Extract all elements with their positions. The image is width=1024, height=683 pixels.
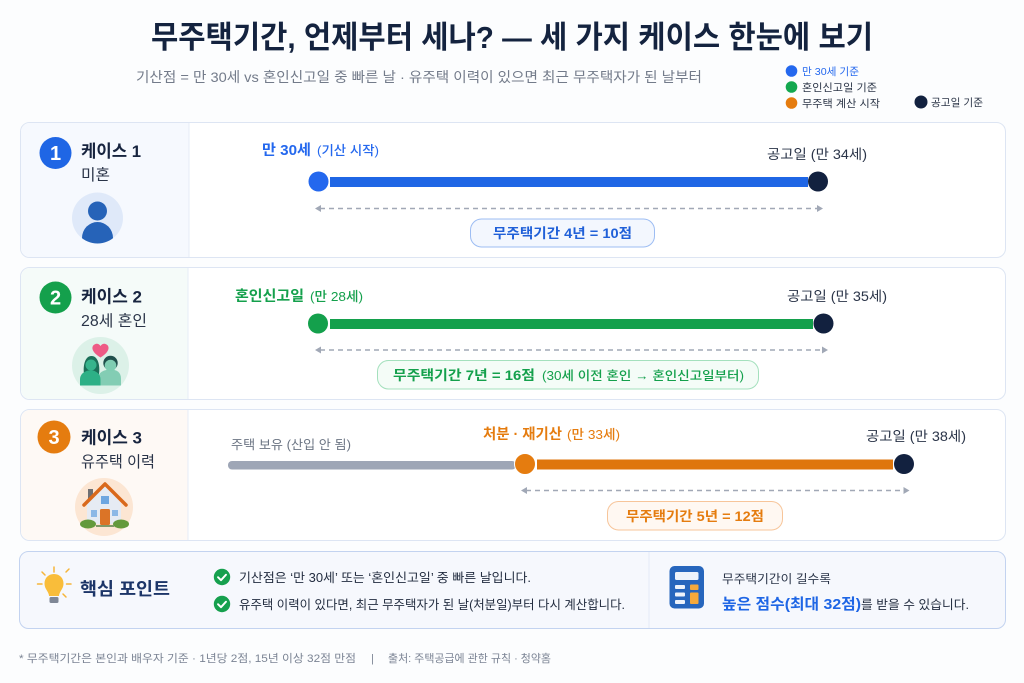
case 3 timeline: [228, 454, 914, 474]
case 3 badge: [38, 420, 70, 454]
panel: key points: [20, 552, 1006, 628]
score note: 높은 점수(최대 32점): [722, 596, 861, 613]
case 3 result pill: [608, 502, 782, 530]
legend: 공고일 기준: [931, 96, 983, 109]
case 2 start label: 혼인신고일: [235, 288, 304, 305]
legend: [786, 65, 983, 110]
panel: case 2: [20, 268, 1006, 400]
case 1 end label: 공고일 (만 34세): [767, 147, 867, 162]
icon: couple with heart: [72, 337, 129, 394]
key point 2: 유주택 이력이 있다면, 최근 무주택자가 된 날(처분일)부터 다시 계산합니다.: [239, 598, 625, 612]
legend: 무주택 계산 시작: [802, 98, 880, 110]
case 3 restart label: (만 33세): [567, 427, 620, 442]
case 1 badge: 1: [50, 143, 61, 165]
subtitle: 기산점 = 만 30세 vs 혼인신고일 중 빠른 날 · 유주택 이력이 있으면 최근 무주택자가 된 날부터: [136, 69, 702, 85]
footnote: |: [371, 653, 374, 665]
legend: 혼인신고일 기준: [802, 81, 877, 94]
case 1 start label: 만 30세: [262, 142, 311, 159]
case 3 excluded label: 주택 보유 (산입 안 됨): [231, 438, 351, 452]
case 3 duration arrow: [521, 487, 910, 494]
case 1 result pill: 무주택기간 4년 = 10점: [493, 226, 632, 241]
case 3 result pill: 무주택기간 5년 = 12점: [626, 509, 764, 524]
case 3 restart label: 처분 · 재기산: [483, 426, 562, 443]
footnote: 출처: 주택공급에 관한 규칙 · 청약홈: [388, 651, 551, 665]
case 1 result pill: [470, 219, 654, 247]
key point 1: 기산점은 ‘만 30세’ 또는 ‘혼인신고일’ 중 빠른 날입니다.: [239, 571, 531, 585]
icon: calculator: [670, 566, 704, 608]
case 3 end label: 공고일 (만 38세): [866, 429, 966, 444]
case 1 subheading: 미혼: [81, 166, 110, 184]
case 2 result pill: [378, 360, 758, 389]
case 3 restart label: [483, 426, 620, 443]
case 2 result pill: 무주택기간 7년 = 16점: [393, 368, 535, 383]
score note: 무주택기간이 길수록: [722, 572, 831, 586]
case 1 timeline: [308, 172, 828, 192]
case 2 end label: 공고일 (만 35세): [787, 289, 887, 304]
case 2 duration arrow: [315, 346, 828, 354]
case 1 badge: [40, 137, 72, 169]
panel: case 3: [20, 410, 1006, 540]
panel: case 1: [20, 122, 1006, 258]
score note: [722, 572, 969, 613]
case 2 subheading: 28세 혼인: [81, 312, 147, 330]
case 2 badge: [40, 282, 72, 314]
score note: 를 받을 수 있습니다.: [861, 598, 969, 612]
legend: 만 30세 기준: [802, 66, 859, 78]
case 2 start label: (만 28세): [310, 289, 363, 304]
case 3 subheading: 유주택 이력: [81, 453, 155, 471]
case 1 start label: (기산 시작): [317, 143, 379, 158]
icon: house: [75, 478, 133, 536]
case 3 badge: 3: [48, 427, 60, 449]
case 2 start label: [235, 288, 363, 305]
case 2 result pill: (30세 이전 혼인 → 혼인신고일부터): [542, 368, 744, 383]
case 2 heading: 케이스 2: [81, 288, 142, 306]
case 3 heading: 케이스 3: [81, 428, 142, 448]
footnote: [19, 651, 551, 665]
footnote: * 무주택기간은 본인과 배우자 기준 · 1년당 2점, 15년 이상 32점 만점: [19, 652, 356, 665]
title: 무주택기간, 언제부터 세나? — 세 가지 케이스 한눈에 보기: [151, 20, 873, 55]
case 2 timeline: [308, 314, 834, 334]
case 1 start label: [262, 142, 379, 159]
key points heading: 핵심 포인트: [80, 579, 170, 599]
case 1 heading: 케이스 1: [81, 142, 141, 161]
icon: light bulb: [38, 567, 71, 603]
icon: single person: [72, 192, 123, 244]
case 2 badge: 2: [50, 288, 61, 310]
case 1 duration arrow: [315, 205, 823, 212]
